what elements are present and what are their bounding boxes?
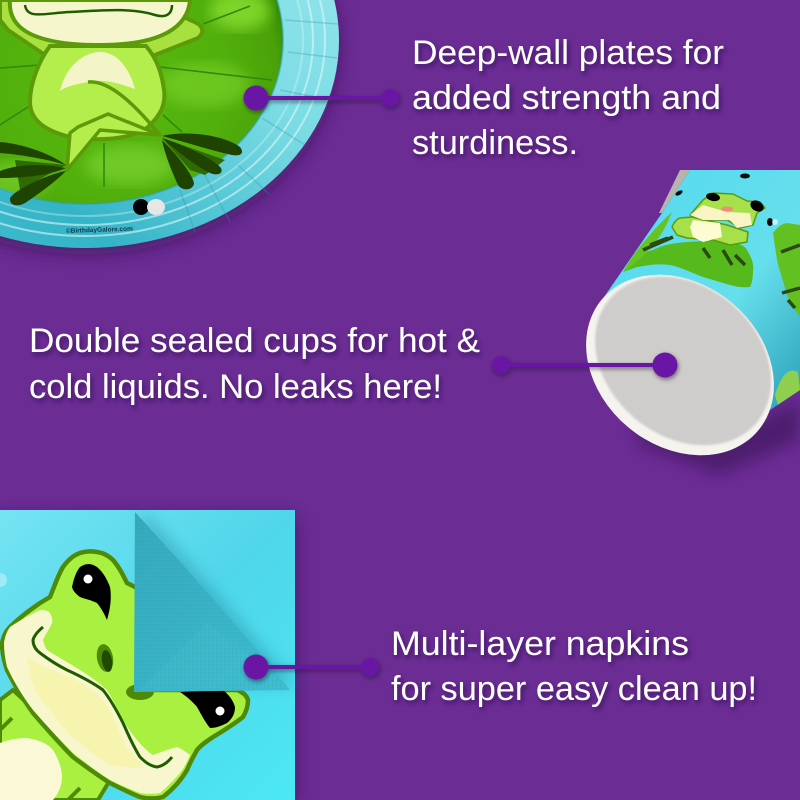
frog crossed legs <box>67 114 160 170</box>
text: plates: added strength and <box>412 79 721 117</box>
frog arms <box>0 0 202 55</box>
napkin sheet <box>0 510 295 800</box>
napkin fold shadow <box>143 508 298 686</box>
plate copyright: ©BirthdayGalore.com <box>66 225 133 235</box>
frog mouth <box>10 0 190 45</box>
napkin fold flap <box>134 512 290 692</box>
callout: napkin pointer <box>244 654 379 680</box>
cup base <box>550 237 800 493</box>
cup body <box>602 170 800 410</box>
text: napkins: for super easy clean up! <box>391 670 757 708</box>
plate fly <box>133 199 165 215</box>
text: cups: cold liquids. No leaks here! <box>29 368 442 406</box>
frog belly <box>60 52 135 91</box>
cup frog head <box>690 193 765 228</box>
cup inner lip <box>659 170 690 213</box>
napkin frog <box>0 551 248 800</box>
text: napkins <box>391 625 757 708</box>
text: plates: sturdiness. <box>412 124 578 162</box>
cup flies <box>675 174 778 226</box>
text: cups: Double sealed cups for hot & <box>29 322 480 360</box>
plate frog <box>0 0 242 205</box>
callout: cup pointer <box>492 352 678 378</box>
frog body <box>0 690 110 800</box>
cup shadow <box>620 340 800 475</box>
frog body <box>30 46 164 139</box>
panel: plate <box>0 0 339 248</box>
frog left foot <box>0 142 66 205</box>
callout: plate pointer <box>244 86 399 110</box>
cup leaves <box>623 212 800 412</box>
frog right foot <box>162 133 242 189</box>
cup frog <box>672 192 766 245</box>
frog head <box>2 551 248 798</box>
text: plates <box>412 34 724 162</box>
text: plates: Deep-wall plates for <box>412 34 724 72</box>
frog mouth <box>4 610 190 794</box>
frog eyes <box>72 564 111 620</box>
frog nostrils <box>95 643 115 673</box>
plate leaf centre <box>0 0 283 204</box>
text: cups <box>29 322 480 406</box>
text: napkins: Multi-layer napkins <box>391 625 689 663</box>
plate rim <box>0 0 339 248</box>
panel: cup <box>586 170 800 478</box>
cup frog body <box>672 217 748 245</box>
panel: napkin <box>0 508 298 800</box>
